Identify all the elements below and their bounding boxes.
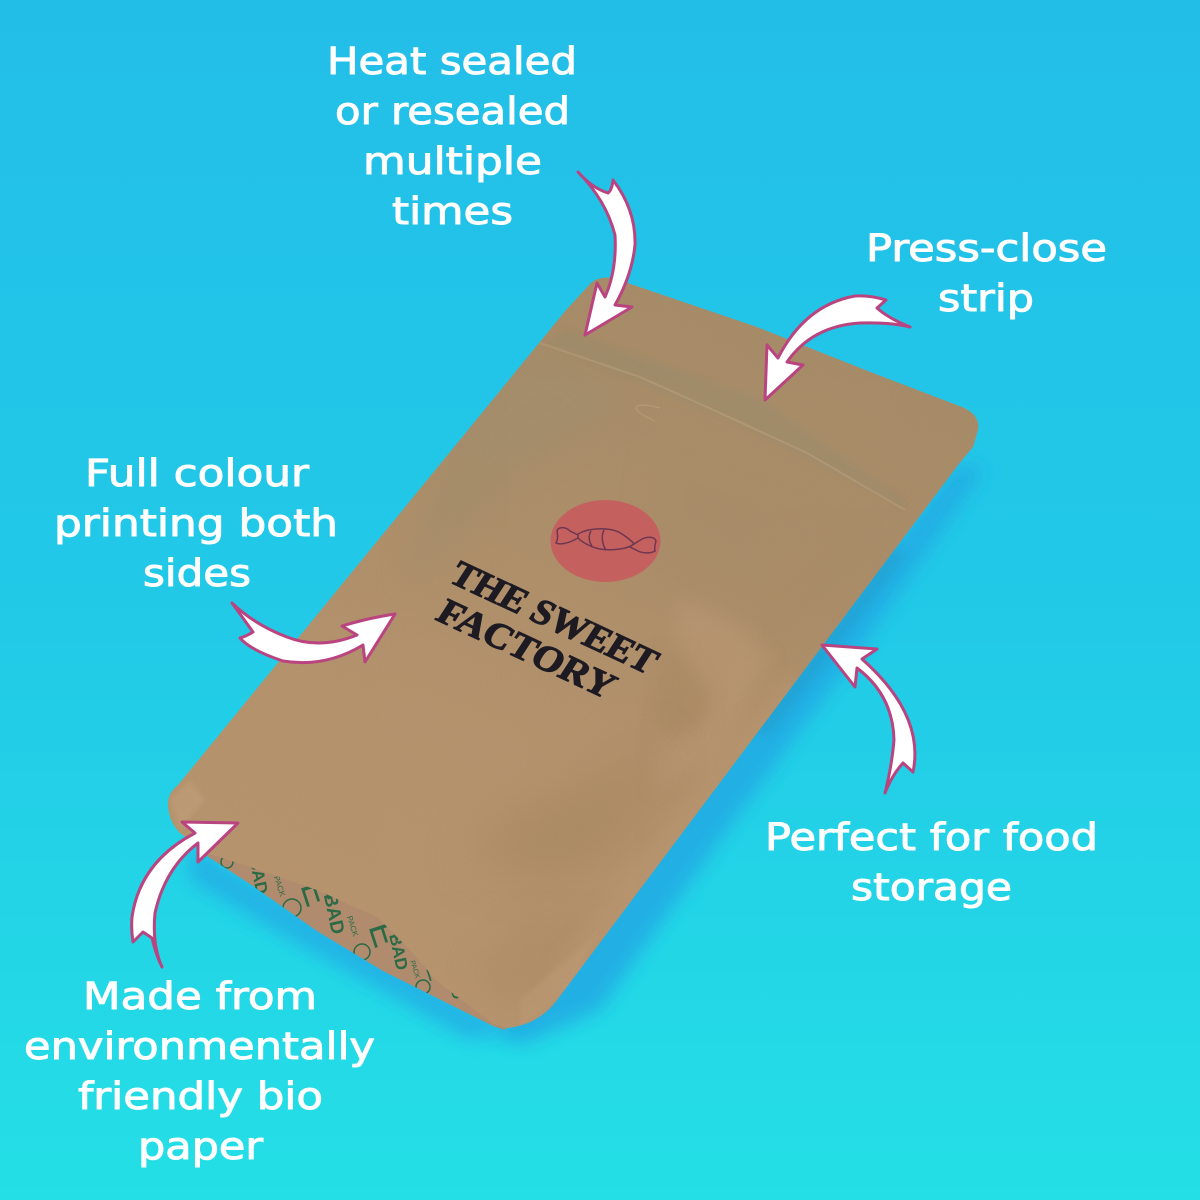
pouch front — [150, 260, 1000, 1050]
label: full colour printing: printing both — [54, 501, 338, 545]
label: bio paper: paper — [138, 1124, 264, 1168]
label: bio paper: friendly bio — [78, 1074, 323, 1118]
seal strip — [558, 337, 900, 502]
pouch gusset with inner print: E — [361, 916, 407, 952]
pouch creases — [692, 624, 751, 660]
arrow: bio paper — [132, 822, 238, 967]
label: heat sealed: or resealed — [335, 89, 570, 133]
label: bio paper: Made from — [83, 974, 317, 1018]
pouch gusset with inner print: PACK — [345, 915, 360, 938]
label: bio paper — [24, 974, 375, 1168]
label: full colour printing — [54, 451, 338, 595]
sticker circle with sweet icon — [550, 500, 660, 582]
label: press-close strip — [866, 226, 1107, 320]
label: food storage: Perfect for food — [765, 815, 1098, 859]
label: food storage: storage — [851, 865, 1012, 909]
arrow: press-close strip — [765, 296, 910, 400]
pouch gusset with inner print: PACK — [272, 875, 287, 898]
pouch gusset with inner print: BAD — [245, 856, 272, 896]
brand name: FACTORY — [429, 592, 624, 707]
pouch gusset with inner print: PACK — [408, 960, 421, 980]
pouch — [150, 260, 1000, 1050]
pouch gusset with inner print — [206, 854, 506, 1030]
pouch gusset with inner print: BAD — [319, 892, 348, 936]
pouch gusset with inner print: D — [448, 987, 466, 1001]
bag shadow — [190, 465, 985, 1045]
label: full colour printing: Full colour — [85, 451, 310, 495]
brand name: THE SWEET — [442, 554, 666, 682]
label: press-close strip: strip — [938, 276, 1034, 320]
arrow: food storage — [822, 645, 915, 793]
label: heat sealed: times — [392, 189, 513, 233]
label: press-close strip: Press-close — [866, 226, 1107, 270]
label: food storage — [765, 815, 1098, 909]
arrow: full colour printing — [232, 603, 395, 663]
label: heat sealed: Heat sealed — [327, 39, 577, 83]
label: heat sealed: multiple — [363, 139, 542, 183]
label: full colour printing: sides — [143, 551, 251, 595]
pouch gusset with inner print: E — [293, 875, 339, 911]
label: heat sealed — [327, 39, 577, 233]
label: bio paper: environmentally — [24, 1024, 375, 1068]
arrow: heat seal — [578, 172, 635, 335]
pouch gusset with inner print: E — [421, 962, 449, 984]
pouch gusset with inner print: BAD — [385, 932, 412, 972]
